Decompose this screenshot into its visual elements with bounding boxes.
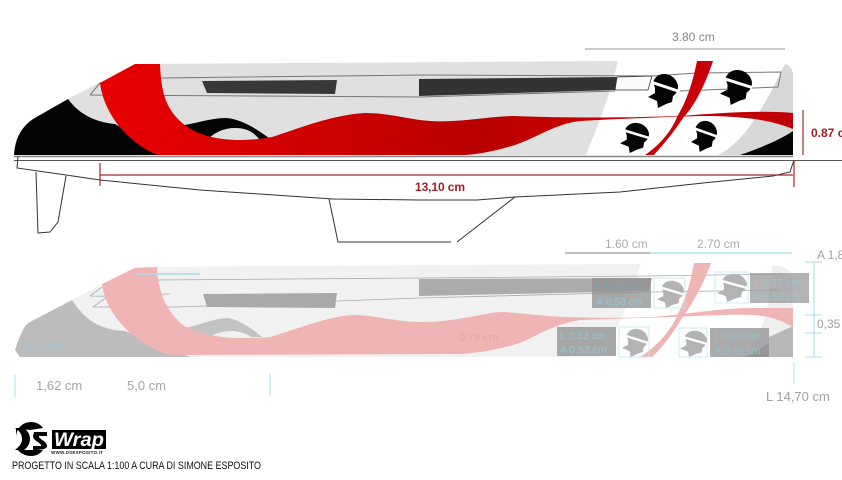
dimension: 1.60 and 2.70 bar: [565, 237, 792, 253]
label: width top: 3.80 cm: [672, 30, 715, 44]
dimension: width top: [585, 48, 785, 50]
measure box 4: L 0.60 cm: [714, 331, 760, 343]
keel outline: [329, 197, 515, 242]
pink cross stripe: [640, 263, 711, 357]
lower hull outline: [17, 156, 794, 233]
dark window left: [202, 80, 337, 94]
measure box 3: L 0.53 cm: [560, 330, 606, 342]
grey moor head 4: [679, 328, 707, 357]
logo DS mark: [15, 422, 47, 456]
logo: [15, 422, 106, 456]
measure box 1: [592, 278, 651, 308]
black bow: [14, 99, 170, 155]
dimension: total length: L 14,70 cm: [766, 389, 830, 404]
measure box 3: [557, 327, 616, 356]
red wave: [100, 64, 793, 155]
dimension: bottom left: 5,0 cm: [127, 378, 166, 393]
dimension: height: [802, 110, 804, 155]
logo wordmark: Wrap: [54, 430, 104, 451]
dimension: length: [100, 160, 794, 187]
faded hull body: [15, 264, 640, 357]
grey moor head 1: [654, 278, 685, 308]
dimension: total length: [766, 362, 830, 404]
dimension: 1.60 and 2.70 bar: 2.70 cm: [697, 237, 740, 251]
grey window left: [203, 293, 337, 308]
moor head 1: [648, 74, 678, 108]
grey moor head 3: [619, 327, 649, 357]
red diagonal cross stripe: [645, 61, 713, 155]
grey stern square: [769, 326, 793, 357]
grey stern block: [745, 326, 793, 357]
hull grey body: [14, 61, 618, 155]
moor head 3: [620, 123, 649, 153]
measure box 1: L 0.53 cm: [597, 281, 643, 293]
dimension: heights right: 0,35: [817, 317, 841, 331]
logo url: WWW.DSESPOSITO.IT: [51, 450, 103, 455]
upper deck lines: [90, 72, 781, 97]
measure box 4: A 0.45 cm: [714, 345, 761, 357]
dimension: bottom left: 1,62 cm: [36, 378, 82, 393]
faded deck lines: [90, 274, 781, 307]
dimension: heights right: [805, 248, 842, 357]
cyan top mark: [136, 273, 200, 275]
grey swoosh: [185, 318, 262, 338]
measure box 3: A 0.53 cm: [560, 344, 607, 356]
top hull drawing: [14, 30, 842, 242]
measure box 2: L 0.57 cm: [754, 277, 800, 289]
pink wave: [102, 267, 793, 355]
dimension: 1.60 and 2.70 bar: 1.60 cm: [605, 237, 648, 251]
faded stern panel: [740, 266, 793, 357]
grey bow: [15, 300, 190, 357]
waterline: [14, 156, 793, 158]
bottom measured hull drawing: [15, 237, 842, 404]
stern grey panel: [718, 64, 793, 155]
measure box 4: [710, 328, 769, 357]
grey moor head 2: [715, 272, 748, 303]
label: length: 13,10 cm: [415, 180, 465, 194]
grey window long: [419, 278, 652, 296]
dark window long: [419, 77, 617, 96]
black stern corner: [740, 131, 793, 155]
dimension: bottom left: [15, 374, 270, 397]
black swoosh: [178, 118, 269, 139]
measure box 1: A 0.53 cm: [596, 296, 643, 308]
caption: PROGETTO IN SCALA 1:100 A CURA DI SIMONE ESPOSITO: [12, 460, 261, 472]
white window: [615, 76, 652, 90]
measure box 2: [750, 273, 809, 303]
label: wave width: 0.78 cm: [459, 332, 498, 344]
measure box 2: A 0.53 cm: [754, 291, 801, 303]
moor head 2: [720, 70, 752, 105]
label: bow height: 1.10 cm: [25, 341, 64, 353]
moor head 4: [691, 121, 717, 152]
